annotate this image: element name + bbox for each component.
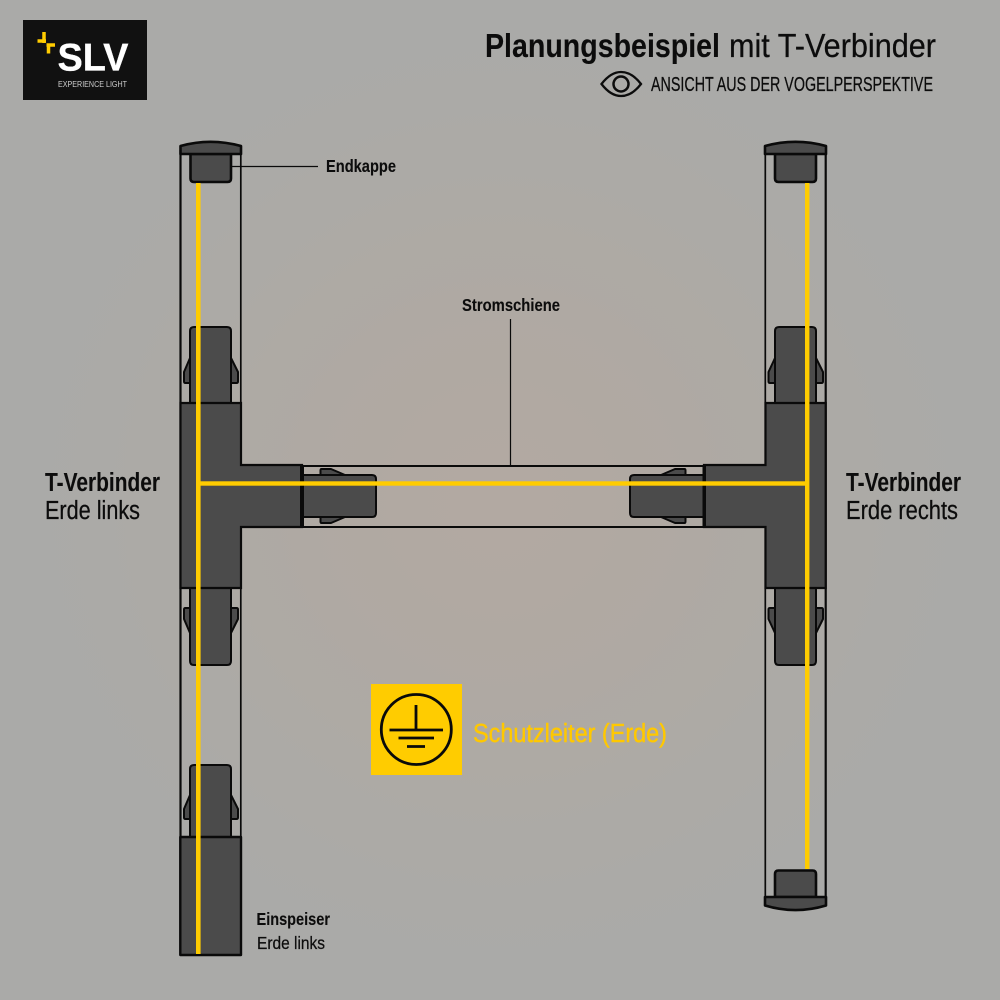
left rail outline [180, 150, 241, 955]
connector below T left [184, 588, 238, 665]
label: Einspeiser Erde links: Erde links [257, 933, 325, 953]
end cap top right [765, 142, 826, 182]
T connector left [180, 403, 302, 588]
T connector left end plate [300, 465, 304, 527]
legend label: Schutzleiter (Erde) [473, 720, 667, 748]
label: T-Verbinder Erde rechts [846, 469, 961, 525]
horizontal rail [302, 466, 704, 527]
label: Einspeiser Erde links: Einspeiser [256, 909, 330, 929]
label: T-Verbinder Erde links [45, 469, 160, 525]
connector upper right [768, 327, 823, 403]
label: T-Verbinder Erde links: T-Verbinder [45, 469, 160, 497]
T connector right end plate [702, 465, 706, 527]
right rail outline [765, 150, 826, 900]
right rail with connectors [765, 142, 826, 910]
left rail with connectors [180, 142, 241, 955]
title [485, 27, 936, 64]
leader line: Stromschiene [510, 319, 512, 466]
logo tagline: EXPERIENCE LIGHT [58, 80, 127, 89]
label: Endkappe: Endkappe [326, 156, 396, 176]
protective earth conductor lines [196, 183, 809, 954]
icon: eye [602, 72, 641, 96]
label: T-Verbinder Erde links: Erde links [45, 497, 140, 525]
connector horizontal left [302, 469, 376, 523]
connector above feed left [184, 765, 238, 837]
title: Planungsbeispiel [485, 27, 720, 64]
end cap top left [180, 142, 241, 182]
logo: SLV [23, 20, 147, 100]
horizontal rail outline [302, 466, 704, 527]
end cap bottom right [765, 870, 826, 910]
feed-in left [180, 837, 241, 955]
logo wordmark: SLV [58, 36, 128, 80]
title: mit T-Verbinder [729, 27, 936, 64]
icon: yellow plus [38, 32, 55, 54]
connector upper left [184, 327, 238, 403]
label: Einspeiser Erde links [256, 909, 330, 953]
legend: earth symbol [371, 684, 462, 775]
label: T-Verbinder Erde rechts: Erde rechts [846, 497, 958, 525]
label: T-Verbinder Erde rechts: T-Verbinder [846, 469, 961, 497]
connector below T right [768, 588, 823, 665]
connector horizontal right [630, 469, 704, 523]
label: Stromschiene: Stromschiene [462, 295, 560, 315]
leader line: Endkappe [231, 166, 318, 168]
T connector right [704, 403, 826, 588]
